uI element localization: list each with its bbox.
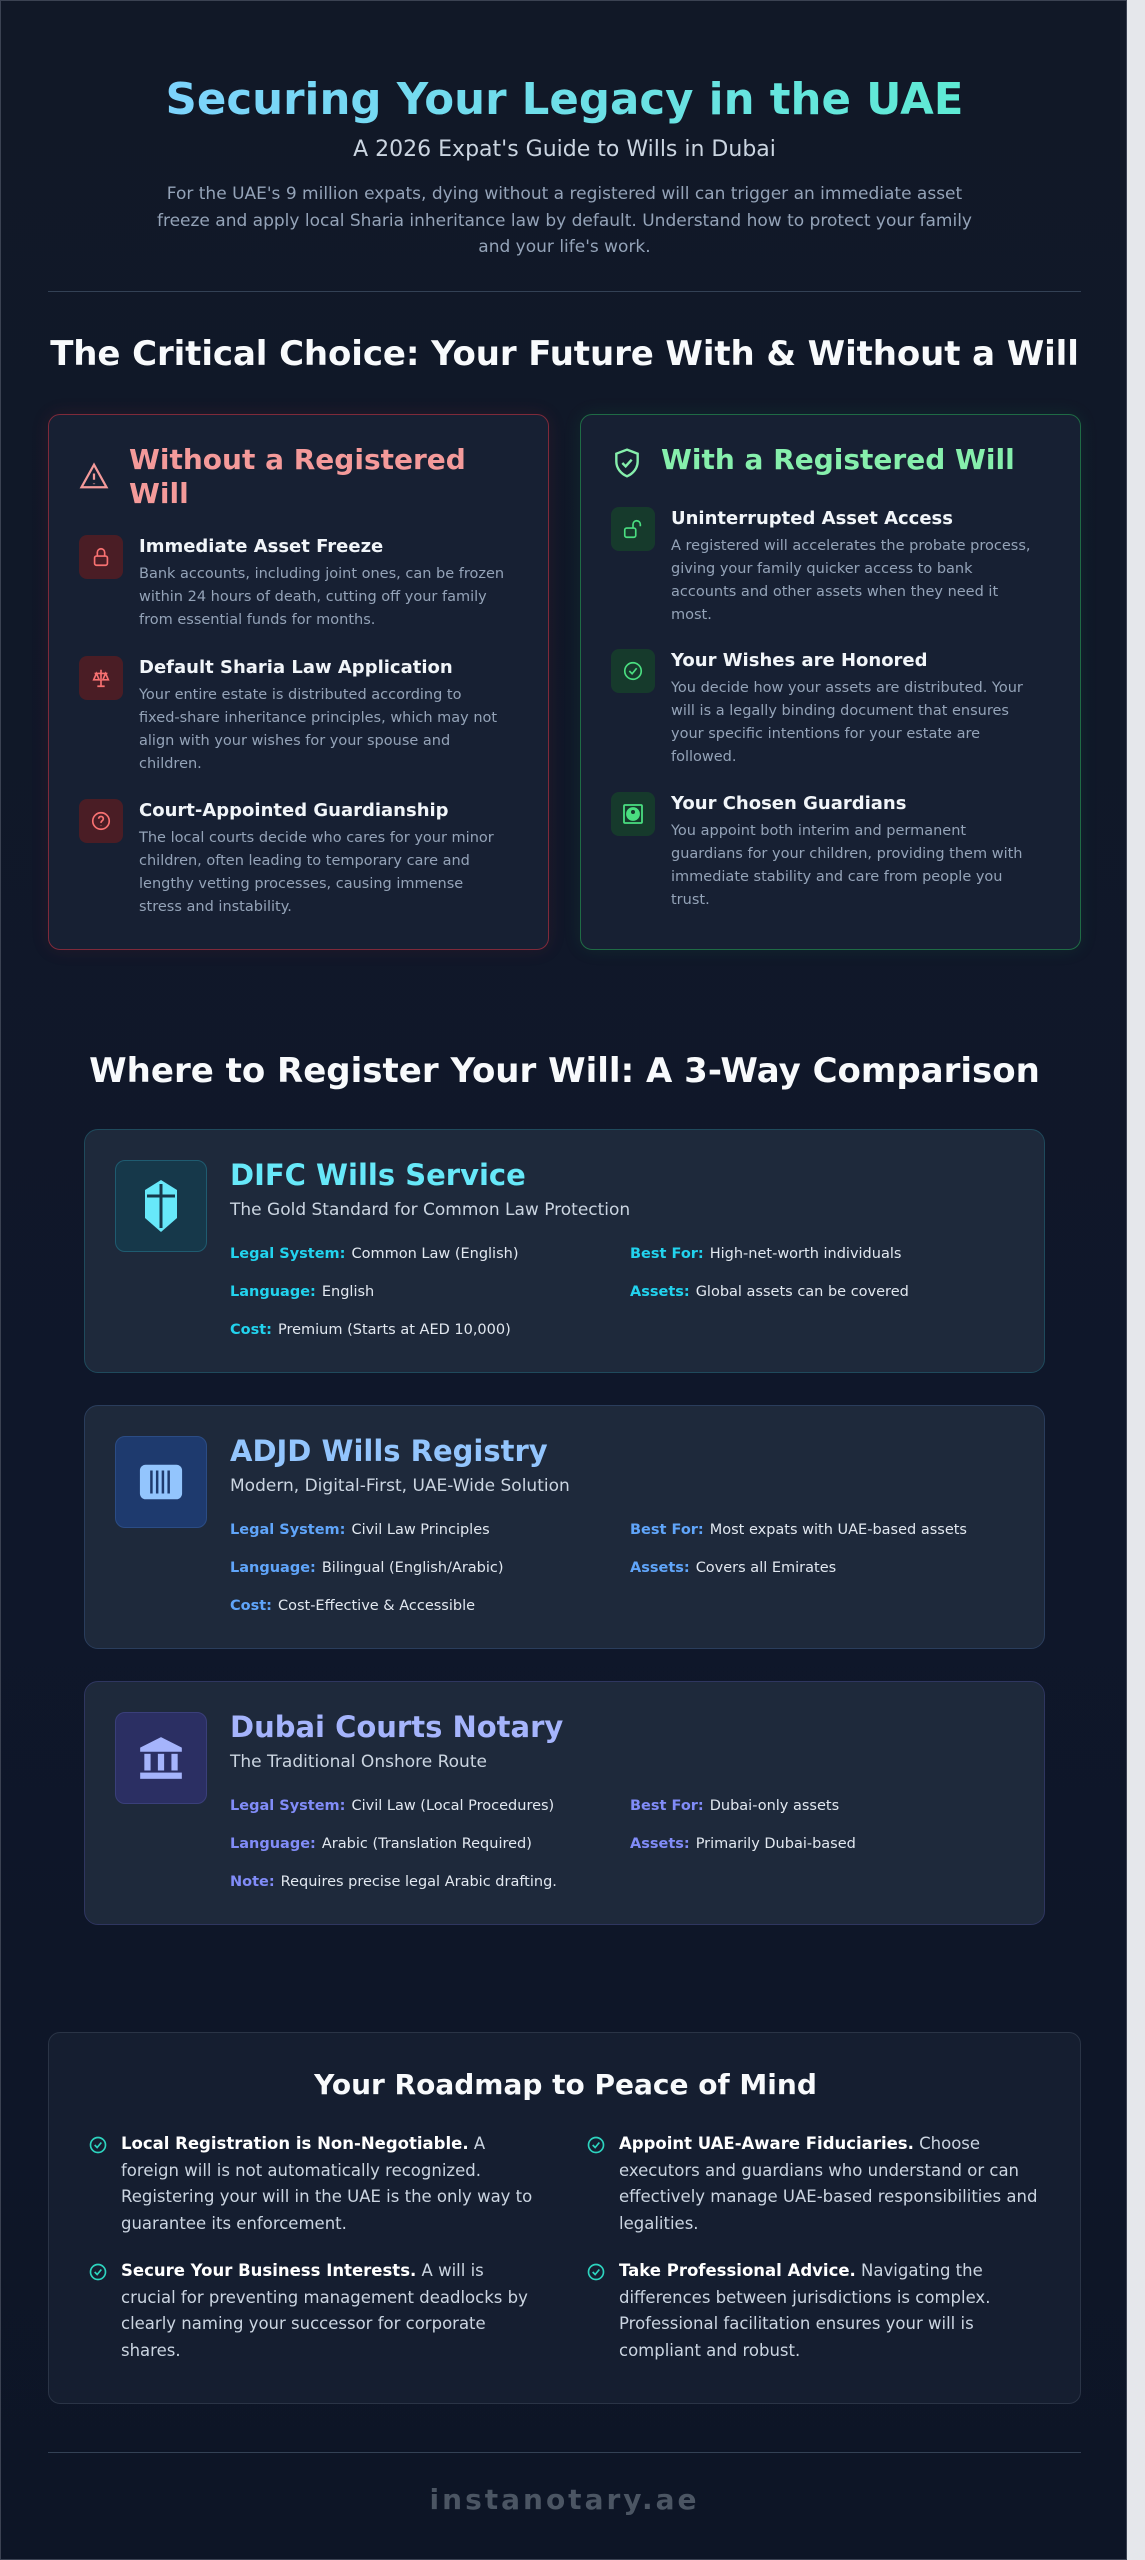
details: ADJD: Legal System: Civil Law Principles [230, 1522, 490, 1538]
item: asset access [611, 507, 1030, 623]
card: Dubai Courts: Best For: Dubai-only assets [630, 1798, 839, 1814]
card: ADJD [84, 1405, 1045, 1649]
card: DIFC [84, 1129, 1045, 1373]
card: DIFC: Language: English [230, 1284, 374, 1300]
heading: where to register: Where to Register Your Will: A 3-Way Comparison [89, 1051, 1040, 1091]
item: guardianship: lengthy vetting processes, causing immense [139, 876, 463, 892]
item: sharia law [79, 656, 497, 772]
item: sharia law: Your entire estate is distributed according to [139, 687, 462, 703]
card: ADJD: Cost: Cost-Effective & Accessible [230, 1598, 475, 1614]
item: asset freeze: within 24 hours of death, cutting off your family [139, 589, 487, 605]
panel heading: with: With a Registered Will [661, 443, 1015, 476]
item: guardians: You appoint both interim and permanent guardians for your children, providing them with immediate stability and care from people you trust. [671, 823, 1022, 908]
item: guardianship [79, 799, 494, 915]
icon: DIFC shield [115, 1160, 207, 1252]
card: DIFC: DIFC Wills Service [230, 1158, 526, 1192]
card: DIFC: Best For: High-net-worth individuals [630, 1246, 901, 1262]
item: fiduciaries: Appoint UAE-Aware Fiduciaries. Choose executors and guardians who understand or can effectively manage UAE-based responsibilities and legalities. [619, 2134, 1037, 2232]
item: guardians: Your Chosen Guardians [671, 793, 906, 814]
item: guardianship: The local courts decide who cares for your minor [139, 830, 494, 846]
subtitle: A 2026 Expat's Guide to Wills in Dubai [353, 137, 776, 162]
card: ADJD: Assets: Covers all Emirates [630, 1560, 836, 1576]
panel heading: without: Without a Registered Will [129, 443, 466, 510]
panel: roadmap [48, 2032, 1081, 2404]
details: DIFC: Legal System: Common Law (English) [230, 1246, 518, 1262]
item: wishes honored [611, 649, 1023, 765]
card: ADJD: Language: Bilingual (English/Arabic) [230, 1560, 504, 1576]
item: local registration: Local Registration is Non-Negotiable. A foreign will is not automatically recognized. Registering your will in the UAE is the only way to guarantee its enforcement. [121, 2134, 532, 2232]
item: sharia law: children. [139, 756, 202, 772]
item: sharia law: align with your wishes for your spouse and [139, 733, 450, 749]
heading: critical choice: The Critical Choice: Your Future With & Without a Will [50, 334, 1079, 374]
item: guardianship: stress and instability. [139, 899, 292, 915]
footer brand: instanotary.ae [430, 2483, 699, 2516]
card: Dubai Courts: Language: Arabic (Translation Required) [230, 1836, 532, 1852]
item: advice: Take Professional Advice. Navigating the differences between jurisdictions is complex. Professional facilitation ensures your will is compliant and robust. [619, 2261, 990, 2360]
item: asset freeze: Immediate Asset Freeze [139, 536, 383, 557]
roadmap heading: Your Roadmap to Peace of Mind [314, 2068, 817, 2101]
panel: with a will [580, 414, 1081, 950]
details: Dubai Courts: Legal System: Civil Law (Local Procedures) [230, 1798, 554, 1814]
item: guardianship: Court-Appointed Guardianship [139, 800, 449, 821]
card: DIFC: The Gold Standard for Common Law Protection [230, 1200, 630, 1220]
item: asset access: Uninterrupted Asset Access [671, 508, 953, 529]
card: Dubai Courts: Assets: Primarily Dubai-based [630, 1836, 856, 1852]
card: DIFC: Cost: Premium (Starts at AED 10,000) [230, 1322, 511, 1338]
card: Dubai Courts [84, 1681, 1045, 1925]
item: sharia law: Default Sharia Law Application [139, 657, 453, 678]
panel: without a will [48, 414, 549, 950]
card: Dubai Courts: The Traditional Onshore Route [230, 1752, 487, 1772]
card: Dubai Courts: Note: Requires precise legal Arabic drafting. [230, 1874, 557, 1890]
item: asset access: A registered will accelerates the probate process, giving your family quicker access to bank accounts and other assets when they need it most. [671, 538, 1030, 623]
item: asset freeze: Bank accounts, including joint ones, can be frozen [139, 566, 504, 582]
card: DIFC: Assets: Global assets can be covered [630, 1284, 909, 1300]
item: guardianship: children, often leading to temporary care and [139, 853, 470, 869]
card: ADJD: ADJD Wills Registry [230, 1434, 548, 1468]
item: wishes honored: Your Wishes are Honored [671, 650, 928, 671]
card: ADJD: Best For: Most expats with UAE-based assets [630, 1522, 967, 1538]
item: business: Secure Your Business Interests. A will is crucial for preventing management deadlocks by clearly naming your successor for corporate shares. [121, 2261, 528, 2360]
title: Securing Your Legacy in the UAE [166, 75, 963, 125]
card: ADJD: Modern, Digital-First, UAE-Wide Solution [230, 1476, 570, 1496]
icon: ADJD registry [115, 1436, 207, 1528]
intro text: For the UAE's 9 million expats, dying without a registered will can trigger an immediate asset freeze and apply local Sharia inheritance law by default. Understand how to protect your family and your life's work. [157, 184, 972, 257]
item: sharia law: fixed-share inheritance principles, which may not [139, 710, 497, 726]
item: guardians [611, 792, 1022, 908]
card: Dubai Courts: Dubai Courts Notary [230, 1710, 563, 1744]
item: asset freeze [79, 535, 504, 628]
icon: courthouse [115, 1712, 207, 1804]
item: wishes honored: You decide how your assets are distributed. Your will is a legally binding document that ensures your specific intentions for your estate are followed. [671, 680, 1023, 765]
item: asset freeze: from essential funds for months. [139, 612, 375, 628]
